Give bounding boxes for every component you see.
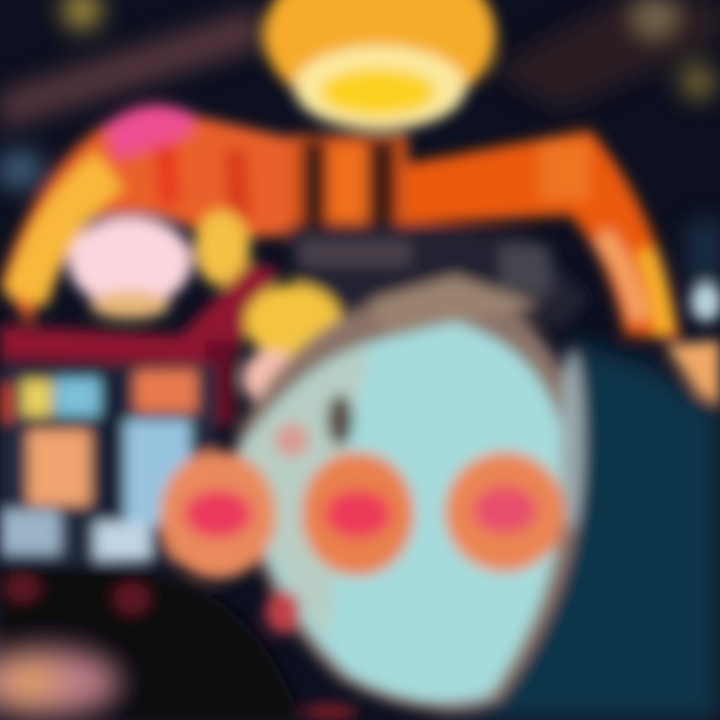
right-edge lower arch glow bbox=[665, 282, 720, 405]
red band and posts bbox=[0, 262, 280, 425]
bottom red edge bbox=[302, 704, 358, 720]
circle: left badge bbox=[160, 451, 276, 579]
small details on oval bbox=[265, 394, 353, 634]
center column stripes bbox=[290, 135, 408, 230]
circle: right badge bbox=[445, 452, 565, 572]
arch interior: pink and white bbox=[68, 210, 250, 319]
circle: middle badge bbox=[302, 452, 414, 576]
pale blue oval bbox=[235, 275, 584, 711]
bottom-left pink glow bbox=[0, 648, 120, 716]
bottom-left dark shape bbox=[0, 565, 300, 720]
arch: orange left and right bbox=[0, 105, 680, 340]
central dark body bbox=[285, 225, 590, 330]
background: beam and lights bbox=[0, 0, 720, 280]
yellow ball bbox=[242, 284, 341, 406]
panel: dark teal right shape bbox=[430, 340, 720, 720]
lower-left colourful columns bbox=[0, 365, 215, 565]
lantern: top yellow bbox=[264, 0, 496, 130]
